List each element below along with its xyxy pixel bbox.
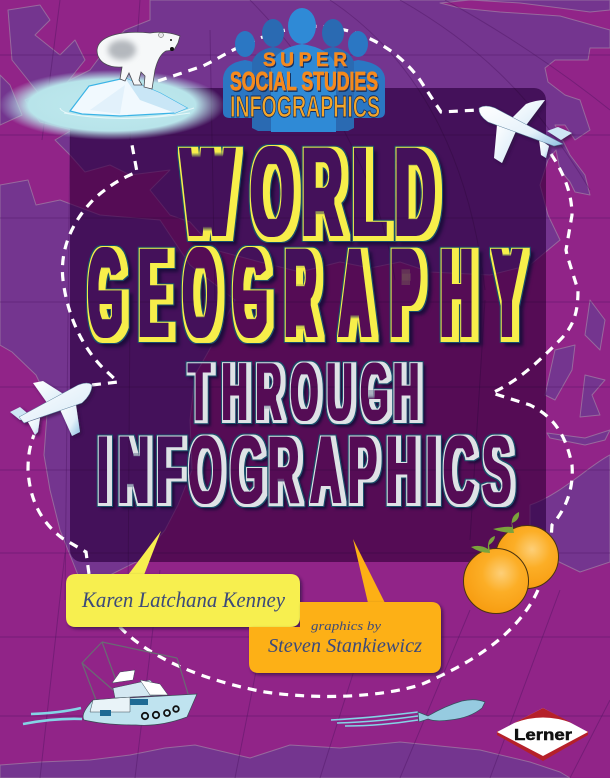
title line: GEOGRAPHY: GEOGRAPHY xyxy=(91,224,525,367)
icon: airplane left xyxy=(10,381,92,436)
callout: illustrator xyxy=(249,539,441,673)
icon: airplane upper right xyxy=(479,100,572,163)
icon: Lerner logo xyxy=(497,708,588,761)
title line: WORLD: WORLD xyxy=(184,121,438,265)
illustrator name: Steven Stankiewicz xyxy=(268,635,422,657)
series logo xyxy=(223,8,385,132)
panel: dark title backdrop xyxy=(70,88,546,562)
author name: Karen Latchana Kenney xyxy=(81,587,285,612)
main title xyxy=(91,121,525,525)
icon: people silhouettes xyxy=(223,8,385,132)
logo wordmark: Lerner xyxy=(514,727,572,744)
icon: fishing boat xyxy=(23,642,197,725)
icon: iceberg xyxy=(60,78,194,118)
dashed route line xyxy=(28,26,578,696)
logo text: SOCIAL STUDIES: SOCIAL STUDIES xyxy=(230,66,378,96)
graphics by label: graphics by xyxy=(311,618,381,633)
icon: fish xyxy=(331,700,485,726)
icon: oranges xyxy=(464,512,558,614)
icon: polar bear xyxy=(97,32,180,89)
logo text: INFOGRAPHICS: INFOGRAPHICS xyxy=(230,89,380,124)
title line: THROUGH: THROUGH xyxy=(190,346,421,439)
glow around iceberg xyxy=(0,70,225,140)
callout: author xyxy=(66,531,300,627)
title line: INFOGRAPHICS: INFOGRAPHICS xyxy=(99,416,513,525)
polar bear on iceberg xyxy=(60,32,194,118)
logo text: SUPER: SUPER xyxy=(263,50,347,71)
